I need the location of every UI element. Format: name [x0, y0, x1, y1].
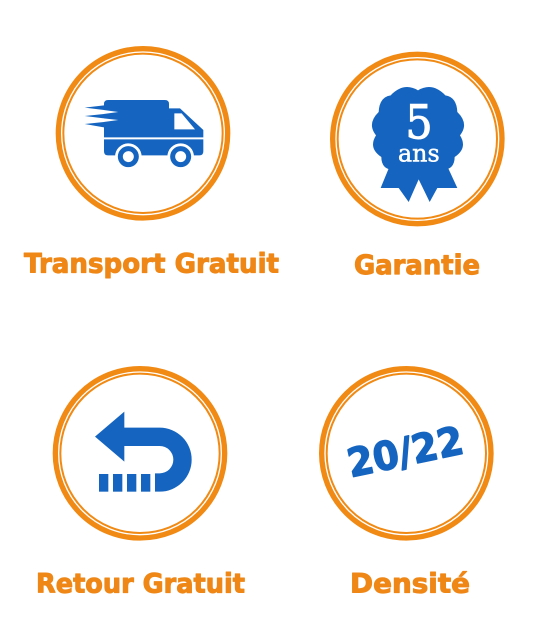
icon: five year ribbon badge: [372, 87, 464, 202]
panel: densité: [322, 369, 491, 600]
panel: transport gratuit: [24, 49, 279, 280]
heading: transport gratuit: Transport Gratuit: [24, 248, 279, 280]
icon: 20/22 density in circle: 20/22: [343, 418, 468, 487]
icon: five year ribbon badge: ans: [398, 138, 440, 167]
panel: retour gratuit: [36, 369, 245, 600]
panel: garantie: [333, 54, 502, 281]
heading: densité: Densité: [350, 568, 470, 600]
icon: 20/22 density in circle: [322, 369, 491, 538]
icon: delivery truck in circle: [58, 49, 228, 218]
icon: return arrow in circle: [55, 369, 225, 538]
heading: retour gratuit: Retour Gratuit: [36, 568, 245, 600]
icon: ring around badge: [333, 54, 502, 224]
heading: garantie: Garantie: [354, 250, 480, 281]
icon: five year ribbon badge: 5: [405, 97, 433, 151]
